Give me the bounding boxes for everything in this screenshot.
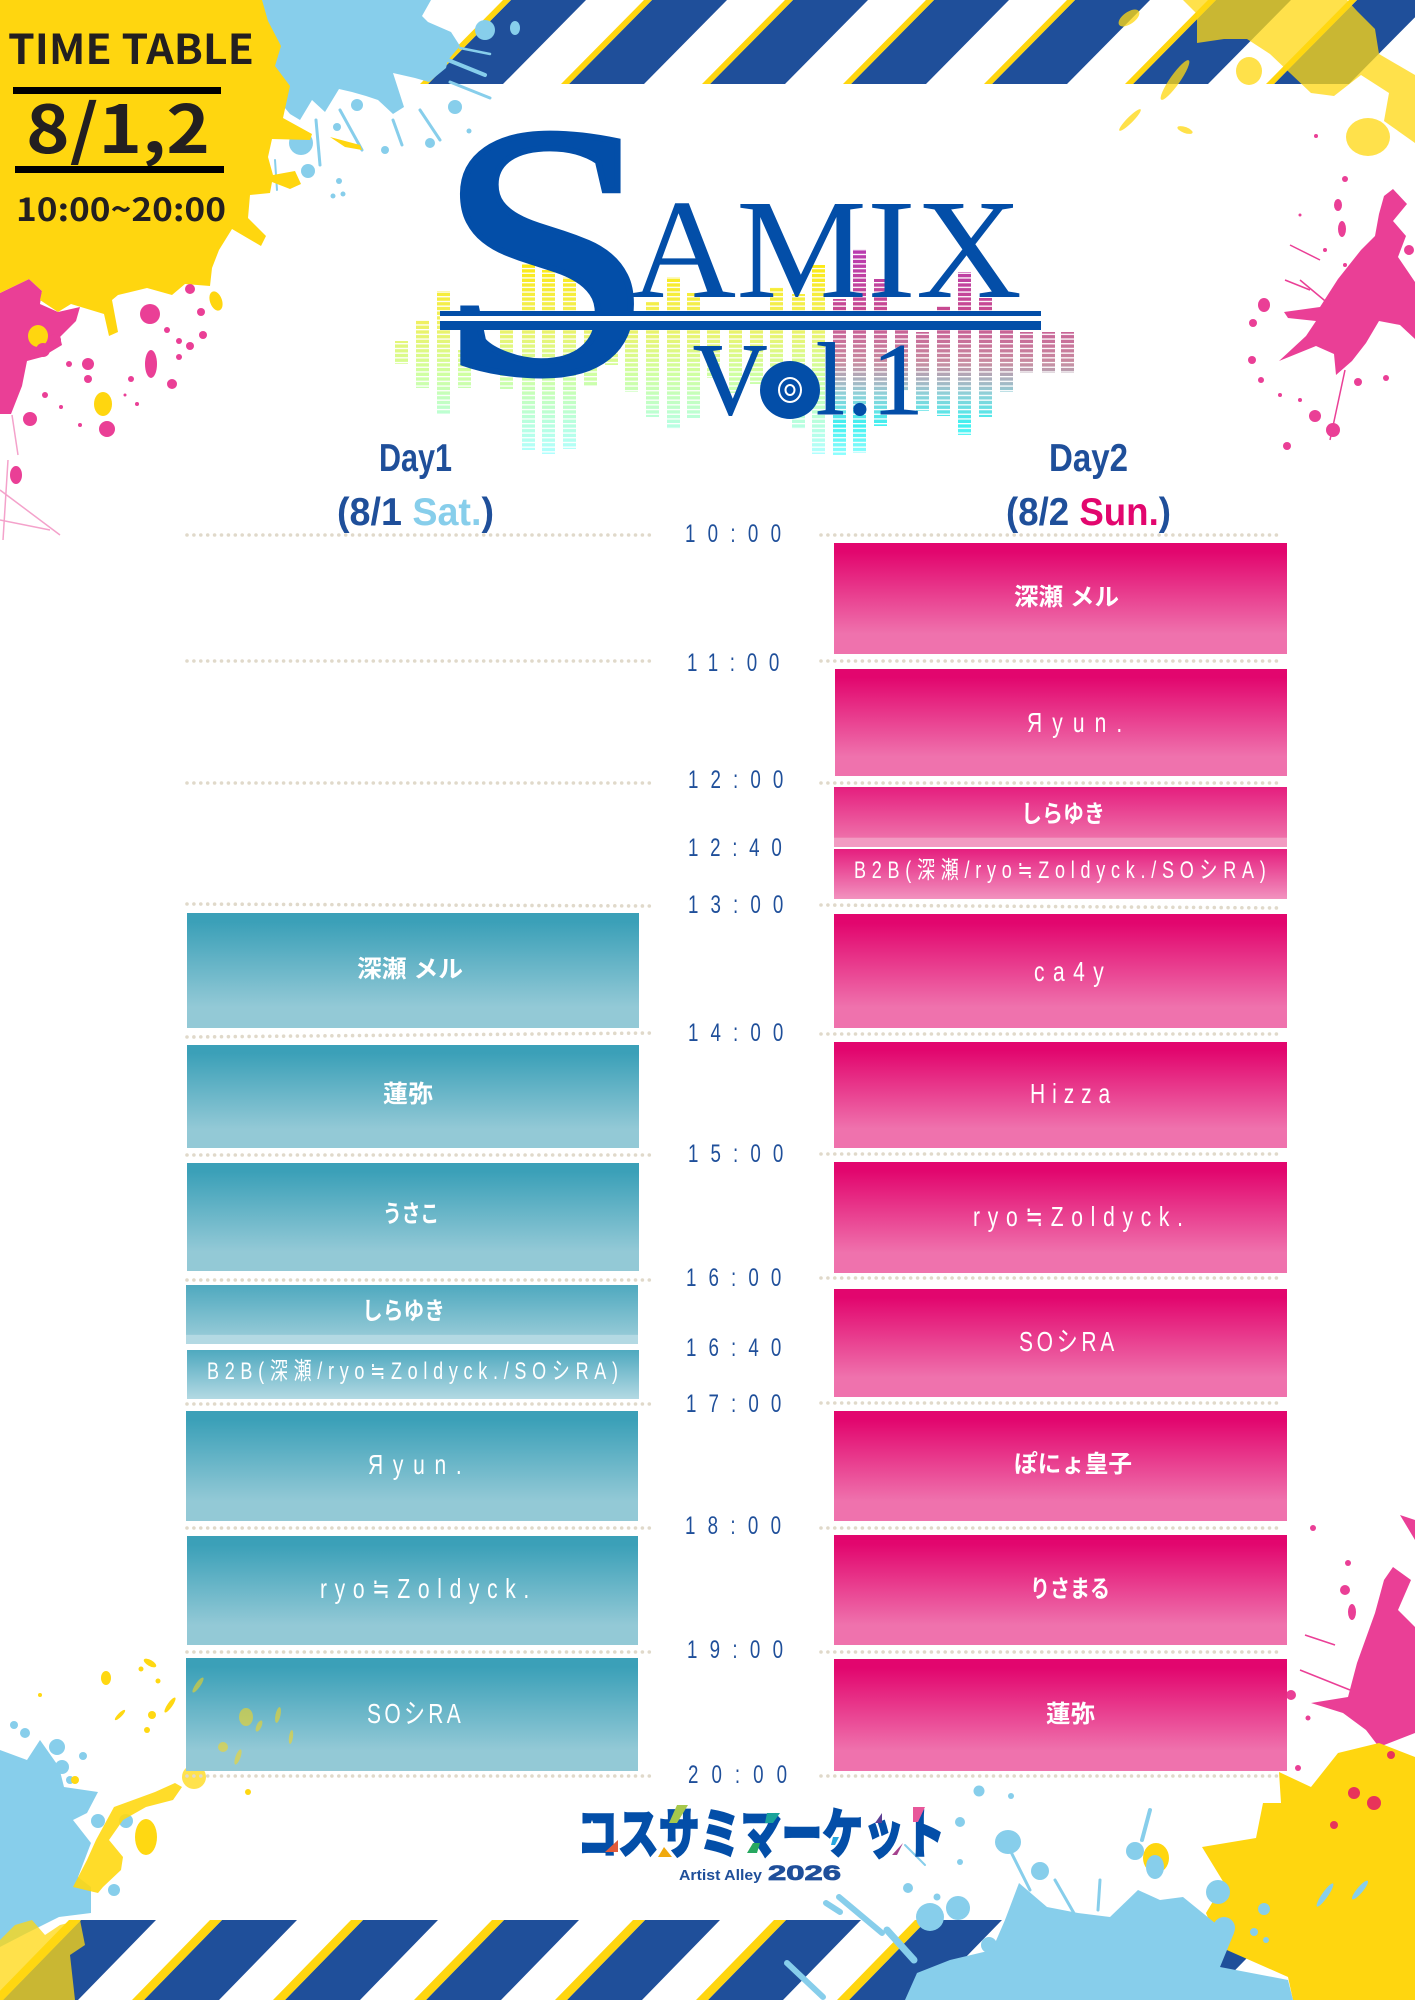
subtitle: Artist Alley bbox=[679, 1867, 763, 1884]
time axis: 16:00 bbox=[686, 1263, 781, 1292]
time axis: 18:00 bbox=[685, 1511, 781, 1540]
slot: 蓮弥 bbox=[834, 1659, 1287, 1771]
letters AMIX: AMIX bbox=[630, 170, 1022, 328]
year: 2026 bbox=[768, 1862, 841, 1885]
heading: day 2: (8/2 Sun.) bbox=[1006, 491, 1171, 534]
wordmark: コスサミマーケット bbox=[577, 1805, 945, 1865]
slot: ryo≒Zoldyck. bbox=[834, 1162, 1287, 1273]
heading: TIME TABLE: TIME TABLE bbox=[8, 16, 254, 76]
splatter: top right bbox=[1116, 0, 1415, 450]
icon: vinyl disc bbox=[760, 361, 820, 419]
label: time table bbox=[8, 16, 254, 231]
time axis: 10:00 bbox=[685, 519, 781, 548]
slot: Hizza: Hizza bbox=[1030, 1079, 1110, 1110]
date rule top bbox=[13, 87, 221, 94]
slot: 深瀬 メル: 深瀬 メル bbox=[1014, 584, 1119, 611]
slot: うさこ bbox=[187, 1163, 639, 1271]
slot: 深瀬 メル bbox=[834, 543, 1287, 654]
slot: ca4y bbox=[834, 914, 1287, 1028]
staff lines bbox=[440, 311, 1041, 330]
slot: SOシRA: SOシRA bbox=[367, 1699, 461, 1730]
logo accents bbox=[581, 1805, 925, 1857]
slot: ryo≒Zoldyck. bbox=[187, 1536, 638, 1645]
slot: B2B bbox=[187, 1350, 639, 1399]
panel: day 2 schedule bbox=[834, 543, 1287, 1771]
slot: ryo≒Zoldyck.: ryo≒Zoldyck. bbox=[320, 1574, 529, 1605]
heading: day 1 bbox=[337, 437, 494, 534]
time axis: 12:40 bbox=[688, 833, 782, 862]
slot: SOシRA bbox=[186, 1658, 638, 1771]
splatter: bottom left bbox=[0, 1657, 251, 2000]
time axis: 15:00 bbox=[688, 1139, 783, 1168]
slot: うさこ: うさこ bbox=[383, 1201, 439, 1228]
heading: day 1: (8/1 Sat.) bbox=[337, 491, 494, 534]
splatter: top left bbox=[0, 0, 520, 540]
time axis: 20:00 bbox=[688, 1760, 787, 1789]
time axis: 12:00 bbox=[688, 765, 783, 794]
slot: SOシRA bbox=[834, 1289, 1287, 1397]
slot: しらゆき bbox=[834, 787, 1287, 847]
splatter: bottom right bbox=[1202, 1515, 1415, 2000]
slot: Яyun.: Яyun. bbox=[1027, 708, 1122, 739]
text Vol.1: Vol.1 bbox=[693, 323, 924, 437]
slot: 深瀬 メル bbox=[187, 913, 639, 1028]
slot: しらゆき bbox=[186, 1285, 638, 1344]
slot: りさまる: りさまる bbox=[1030, 1576, 1110, 1603]
slot: ぽにょ皇子 bbox=[834, 1411, 1287, 1521]
slot: 蓮弥: 蓮弥 bbox=[1046, 1701, 1095, 1728]
slot: SOシRA: SOシRA bbox=[1019, 1327, 1115, 1358]
slot: B2B bbox=[834, 849, 1287, 899]
date: 8/1,2: 8/1,2 bbox=[26, 77, 210, 173]
slot: Яyun. bbox=[835, 669, 1287, 776]
splatter on block bbox=[191, 1676, 294, 1765]
equalizer bars bbox=[390, 245, 1080, 460]
slot: ca4y: ca4y bbox=[1034, 957, 1104, 988]
big letter S: S bbox=[437, 51, 655, 450]
slot: 蓮弥: 蓮弥 bbox=[383, 1081, 433, 1108]
slot: ryo≒Zoldyck.: ryo≒Zoldyck. bbox=[973, 1202, 1183, 1233]
time axis bbox=[685, 519, 787, 1789]
heading: day 1: Day1 bbox=[379, 437, 452, 480]
time axis: 14:00 bbox=[688, 1018, 783, 1047]
slot: 深瀬 メル: 深瀬 メル bbox=[357, 956, 463, 983]
slot: りさまる bbox=[834, 1535, 1287, 1645]
title logo: SAMIX Vol.1 bbox=[390, 51, 1080, 460]
heading: day 2: Day2 bbox=[1049, 437, 1128, 480]
slot: ぽにょ皇子: ぽにょ皇子 bbox=[1014, 1451, 1132, 1478]
slot: Hizza bbox=[834, 1042, 1287, 1148]
heading: day 2 bbox=[1006, 437, 1171, 534]
top stripe band bbox=[420, 0, 1415, 84]
time axis: 11:00 bbox=[687, 648, 779, 677]
slot: Яyun.: Яyun. bbox=[368, 1450, 462, 1481]
date rule bottom bbox=[15, 166, 224, 173]
slot: しらゆき: しらゆき bbox=[1021, 801, 1105, 828]
bottom stripe band bbox=[0, 1920, 1284, 2000]
panel: day 1 schedule bbox=[186, 913, 639, 1771]
time axis: 17:00 bbox=[686, 1389, 781, 1418]
dotted grid lines bbox=[187, 535, 1282, 1776]
time axis: 13:00 bbox=[688, 890, 783, 919]
slot: しらゆき: しらゆき bbox=[362, 1298, 445, 1325]
footer logo: コスサミマーケット Artist Alley 2026 bbox=[577, 1805, 945, 1885]
slot: B2B: B2B(深瀬/ryo≒Zoldyck./SOシRA) bbox=[854, 857, 1266, 884]
time axis: 19:00 bbox=[687, 1635, 783, 1664]
slot: Яyun. bbox=[186, 1411, 638, 1521]
splatter: bottom centre bbox=[787, 1786, 1293, 2000]
slot: B2B: B2B(深瀬/ryo≒Zoldyck./SOシRA) bbox=[207, 1358, 618, 1385]
hours: 10:00~20:00 bbox=[16, 185, 226, 231]
time axis: 16:40 bbox=[686, 1333, 781, 1362]
slot: 蓮弥 bbox=[187, 1045, 639, 1148]
